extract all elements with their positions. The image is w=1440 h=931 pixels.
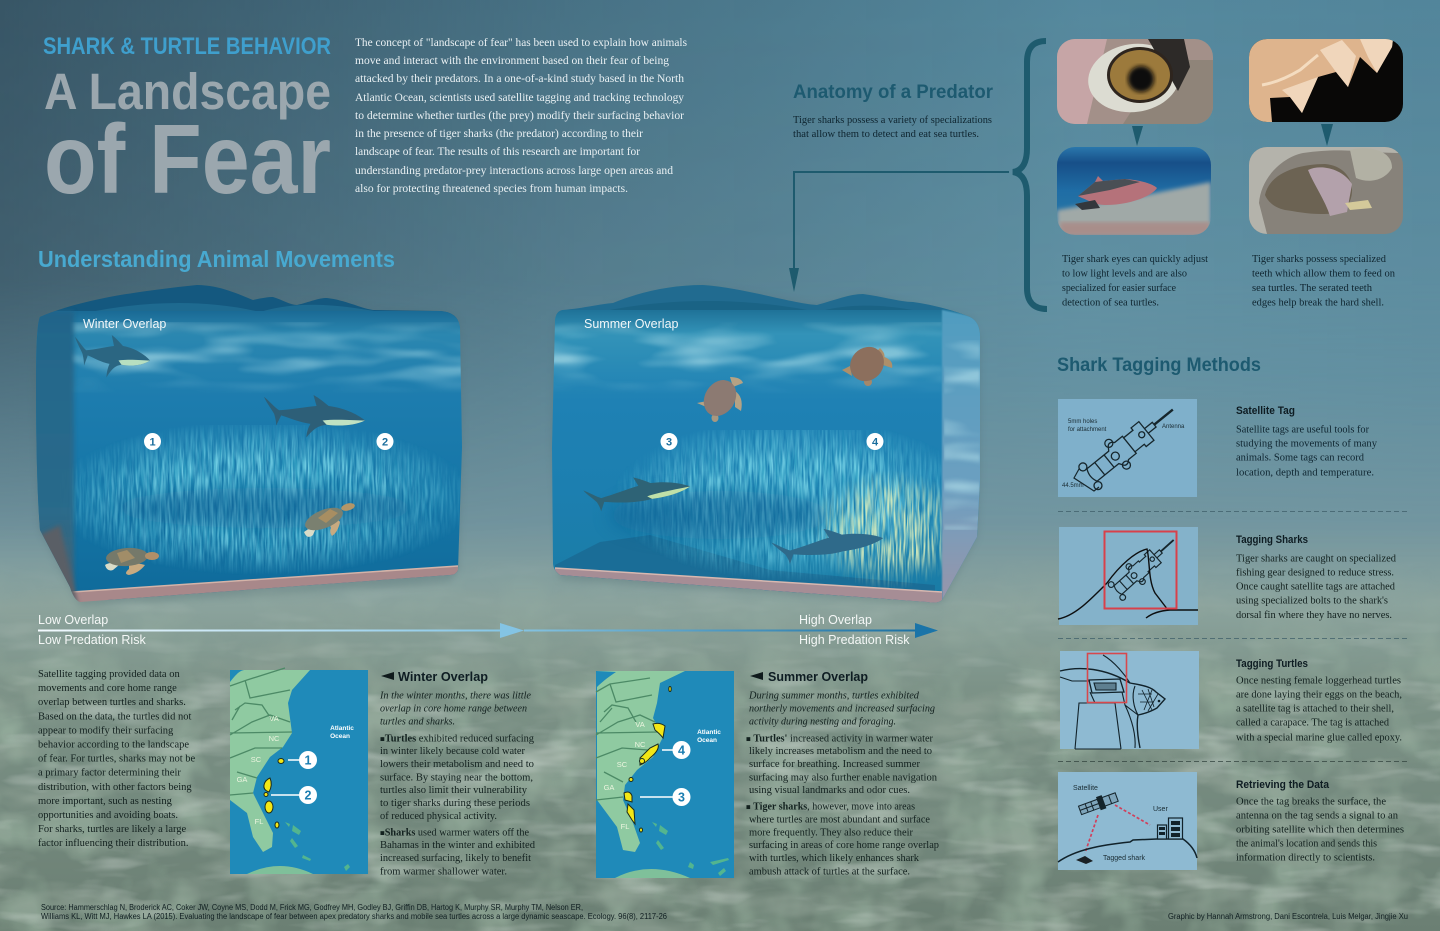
winter overlap text: turtles also limit their vulnerability [380,785,528,796]
heading: understanding animal movements: Understanding Animal Movements [38,246,395,272]
tagging turtles text: Tagging Turtles [1236,658,1308,670]
illustration: retrieving the data: Tagged shark [1103,855,1146,862]
source citation: Source: Hammerschlag N, Broderick AC, Coker JW, Coyne MS, Dodd M, Frick MG, Godfrey MH, Godley BJ, Griffin DB, Hartog K, Murphy SR, Murphy TM, Nelson ER, [41,903,583,912]
marker 2 on map [299,786,317,804]
summer overlap text: northerly movements and increased surfacing [749,704,935,714]
retrieving the data text: the animal's location and sends this [1236,838,1377,850]
graphic credits: Graphic by Hannah Armstrong, Dani Escontrela, Luis Melgar, Jingjie Xu [1168,912,1408,921]
winter overlap text: overlap in core home range between [380,704,527,714]
intro paragraph: Atlantic Ocean, scientists used satellite tagging and tracking technology [355,92,684,104]
winter overlap text: lowers their metabolism and need to [380,759,534,770]
tagging turtles text: with a special marine glue called epoxy. [1236,732,1402,744]
satellite tag text: studying the movements of many [1236,438,1378,450]
winter overlap text: increased surfacing, likely to benefit [380,853,531,864]
caption: shark eyes: to low light levels and are also [1062,268,1187,280]
illustration: satellite tag: 44.5mm [1062,483,1084,489]
anatomy intro text [793,114,992,140]
map: winter overlap: Ocean [330,733,350,740]
illustration: satellite tag: for attachment [1068,427,1107,433]
label: summer overlap: Summer Overlap [584,317,679,331]
summer overlap text: surfacing in areas of core home range overlap [749,840,939,851]
marker 3 [660,433,678,450]
winter overlap text [379,670,536,878]
tagging sharks text: Tiger sharks are caught on specialized [1236,554,1397,564]
summer overlap text: with turtles, which likely enhances shark [749,853,920,864]
tagging turtles text: called a carapace. The tag is attached [1236,718,1390,728]
summer overlap text: During summer months, turtles exhibited [748,690,920,702]
summary text: overlap between turtles and sharks. [38,697,186,708]
tagging sharks text: Tagging Sharks [1236,534,1308,546]
winter overlap text: of reduced physical activity. [380,811,497,822]
bracket: anatomy brace [1013,41,1047,309]
arrow: bracket to summer cube [789,172,1009,292]
photo: bitten turtle [1249,147,1403,234]
illustration: retrieving the data: User [1153,806,1168,813]
summary text: movements and core home range [38,683,177,694]
caption: shark eyes: Tiger shark eyes can quickly adjust [1062,253,1208,265]
summary text: more important, such as nesting [38,796,173,807]
map: winter overlap: GA [237,775,247,784]
summer overlap text: ■ Tiger sharks, however, move into areas [746,802,915,812]
scale labels: low [38,613,146,647]
shark: bottom right [771,516,884,567]
winter overlap text: surface. By staying near the bottom, [380,772,533,784]
intro paragraph: understanding predator-prey interactions across large open areas and [355,165,673,177]
intro paragraph: landscape of fear. The results of this research are important for [355,146,640,158]
caption: shark teeth: teeth which allow them to feed on [1252,268,1396,280]
summary text: opportunities and avoiding boats. [38,810,178,821]
retrieving the data text: Once the tag breaks the surface, the [1236,796,1386,808]
summer overlap text: activity during nesting and foraging. [749,716,896,728]
tagging sharks text: fishing gear designed to reduce stress. [1236,568,1394,578]
illustration: tagging turtles [1060,651,1199,749]
winter overlap text: In the winter months, there was little [379,690,531,702]
caption: shark eyes [1062,253,1208,308]
illustration: retrieving the data: Satellite [1073,785,1098,792]
satellite tag text: Satellite Tag [1236,405,1295,417]
retrieving the data text: Retrieving the Data [1236,779,1330,791]
map: winter overlap: VA [269,714,279,723]
caption: shark teeth: edges help break the hard shell. [1252,296,1384,308]
intro paragraph: in the presence of tiger sharks (the predator) according to their [355,128,643,140]
tagging turtles text: Once nesting female loggerhead turtles [1236,676,1401,686]
map: winter overlap: NC [269,734,280,743]
tagging sharks text: using specialized bolts to the shark's [1236,596,1388,606]
marker 3 on map [672,788,690,806]
summer overlap text: using visual landmarks and odor cues. [749,785,910,796]
intro paragraph [355,37,687,195]
retrieving the data text: antenna on the tag sends a signal to an [1236,810,1399,822]
source citation: Williams KL, Witt MJ, Hawkes LA (2015). Evaluating the landscape of fear between apex predatory sharks and mobile sea turtles across a large dynamic seascape. Ecology. 96(8), 2117-26 [41,912,667,921]
scale labels: high: High Predation Risk [799,633,910,647]
arrow: teeth to turtle photo [1321,124,1333,146]
illustration: retrieving the data [1058,772,1197,870]
anatomy intro text: that allow them to detect and eat sea turtles. [793,128,979,140]
marker 1 [144,433,161,450]
summary text: appear to modify their surfacing [38,726,174,736]
satellite tag text: location, depth and temperature. [1236,466,1374,478]
summer overlap text: surface for breathing. Increased summer [749,759,920,770]
turtle: right surface [842,340,892,388]
marker 2 on map: 2 [305,788,312,802]
map: summer overlap: Ocean [697,737,717,744]
scale labels: low: Low Overlap [38,613,108,627]
marker 4 on map [672,741,690,759]
illustration: satellite tag [1058,396,1197,497]
retrieving the data text [1236,779,1404,864]
tagging sharks text: Once caught satellite tags are attached [1236,582,1396,592]
arrow: eye to shark photo [1132,126,1143,146]
caption: shark teeth: sea turtles. The serated teeth [1252,282,1373,294]
shark: lower left [583,465,691,514]
marker 3: 3 [666,436,672,448]
summary text: of fear. For turtles, sharks may not be [38,754,196,764]
summary text: factor influencing their distribution. [38,838,188,849]
turtle: mid right [302,502,356,537]
map: summer overlap: SC [617,760,628,769]
turtle: left surface [697,374,743,422]
summary text [38,669,196,849]
tagging sharks text [1236,534,1397,621]
summer overlap text: Summer Overlap [768,670,868,684]
illustration: satellite tag: 5mm holes [1068,419,1097,425]
anatomy intro text: Tiger sharks possess a variety of specializations [793,114,992,126]
shark: upper left [75,335,150,378]
map: summer overlap [596,671,734,878]
retrieving the data text: orbiting satellite which then determines [1236,824,1404,836]
summary text: distribution, with other factors being [38,782,192,793]
summary text: Based on the data, the turtles did not [38,712,191,722]
summer overlap text: where turtles are most abundant and surface [749,814,930,826]
panel: winter overlap water cube [30,280,470,610]
scale labels: high [799,613,910,647]
intro paragraph: move and interact with the environment based on their fear of being [355,55,669,67]
satellite tag text: Satellite tags are useful tools for [1236,424,1369,436]
caption: shark teeth: Tiger sharks possess specialized [1252,253,1387,265]
winter overlap text: ■Sharks used warmer waters off the [380,828,529,838]
scale labels: low: Low Predation Risk [38,633,146,647]
marker 1 on map [299,751,317,769]
map: summer overlap: GA [604,783,614,792]
winter overlap text: in winter likely because cold water [380,746,525,757]
scale labels: high: High Overlap [799,613,872,627]
map: summer overlap: VA [635,720,645,729]
photo: shark teeth [1249,39,1403,122]
caption: shark eyes: specialized for easier surface [1062,282,1176,294]
title block [43,33,331,214]
marker 2: 2 [382,436,388,448]
summary text: behavior according to the landscape [38,740,189,750]
map: winter overlap: Atlantic [330,725,354,732]
heading: shark tagging methods: Shark Tagging Methods [1057,354,1261,376]
map: winter overlap: FL [255,817,263,826]
marker 4: 4 [872,436,879,448]
title block: SHARK & TURTLE BEHAVIOR [43,33,331,60]
caption: shark teeth [1252,253,1396,308]
summary text: a primary factor determining their [38,768,181,778]
intro paragraph: to determine whether turtles (the prey) modify their surfacing behavior [355,110,684,122]
winter overlap text: Winter Overlap [398,670,488,684]
source citation [41,903,667,921]
winter overlap text: Bahamas in the winter and exhibited [380,840,536,851]
shark: middle [264,395,365,438]
marker 2 [376,433,394,450]
marker 1: 1 [149,436,156,448]
caption: shark eyes: detection of sea turtles. [1062,296,1159,308]
summer overlap text: more frequently. They also reduce their [749,828,913,838]
summer overlap text [746,670,939,878]
tagging sharks text: dorsal fin where they have no nerves. [1236,610,1392,621]
title block: A Landscape [44,63,331,120]
map: winter overlap: SC [251,755,262,764]
photo: tiger shark swimming [1057,147,1211,236]
illustration: tagging sharks [1058,527,1198,625]
marker 3 on map: 3 [678,790,685,804]
winter overlap text: from warmer shallower water. [380,866,507,878]
photo: shark eye [1057,38,1213,124]
summer overlap text: ambush attack of turtles at the surface. [749,866,910,878]
retrieving the data text: information directly to scientists. [1236,852,1375,864]
intro paragraph: attacked by their predators. In a one-of-a-kind study based in the North [355,73,684,85]
satellite tag text [1236,405,1378,478]
summer overlap text: ■ Turtles' increased activity in warmer water [746,734,933,744]
label: winter overlap: Winter Overlap [83,317,166,331]
summary text: Satellite tagging provided data on [38,669,180,680]
turtle: bottom left [105,547,159,575]
map: summer overlap: Atlantic [697,729,721,736]
tagging turtles text: a satellite tag is attached to their shell, [1236,704,1394,714]
title block: of Fear [44,104,331,214]
summer overlap text: surfacing may also further enable navigation [749,772,938,784]
summer overlap text: likely increases metabolism and the need to [749,746,932,757]
winter overlap text: turtles and sharks. [380,716,455,728]
intro paragraph: The concept of "landscape of fear" has been used to explain how animals [355,37,687,49]
map: summer overlap: NC [635,740,646,749]
map: winter overlap [230,668,368,874]
risk scale arrow [38,623,938,638]
map: summer overlap: FL [621,822,629,831]
illustration: satellite tag: Antenna [1162,424,1185,430]
summary text: For sharks, turtles are likely a large [38,824,187,835]
marker 4 [866,433,884,450]
heading: anatomy of a predator: Anatomy of a Predator [793,81,993,103]
marker 4 on map: 4 [678,744,685,758]
winter overlap text: to tiger sharks during these periods [380,798,530,809]
tagging turtles text: are done laying their eggs on the beach, [1236,690,1402,700]
satellite tag text: animals. Some tags can record [1236,452,1365,464]
tagging turtles text [1236,658,1402,744]
winter overlap text: ■Turtles exhibited reduced surfacing [380,734,535,744]
intro paragraph: also for protecting threatened species from human impacts. [355,183,628,195]
panel: summer overlap water cube [545,280,990,610]
marker 1 on map: 1 [305,754,312,768]
